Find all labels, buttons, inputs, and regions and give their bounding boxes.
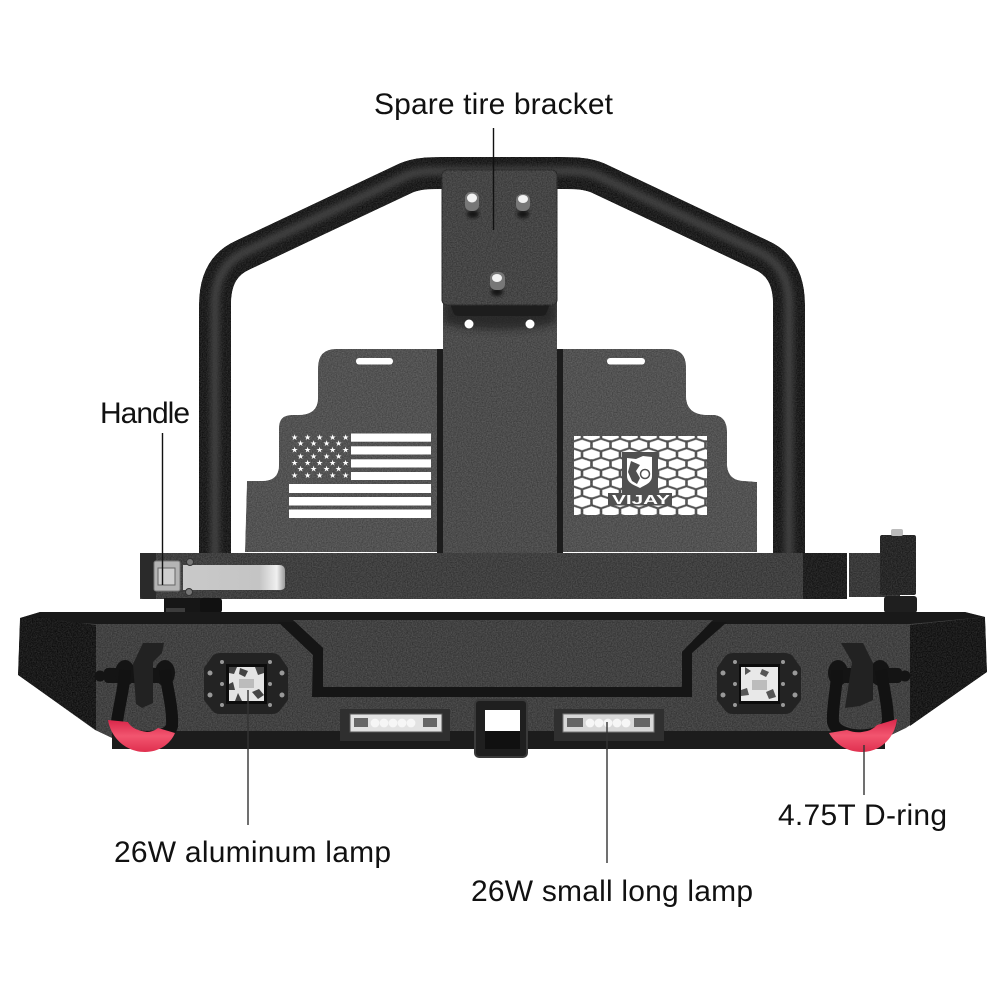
lamp plate [204, 653, 288, 714]
shackle bow [833, 670, 888, 736]
hinge pivot [880, 529, 917, 613]
leader line [606, 722, 608, 863]
lamp bolts [208, 660, 284, 707]
silver handle [154, 558, 285, 596]
left mounting plate with flag cutout [245, 349, 440, 552]
right dark end cap [910, 617, 987, 726]
shackle bow [117, 670, 172, 737]
lamp bolts [720, 660, 798, 707]
infographic: bumper with spare tire carrier [18, 92, 987, 907]
left D-ring shackle [94, 643, 175, 752]
lamp lens [563, 714, 654, 732]
spare tire hoop [215, 171, 789, 560]
lamp lens [739, 664, 780, 704]
latch mechanism under the handle [164, 598, 222, 618]
label: 4.75T D-ring [778, 799, 947, 832]
right long lamp [554, 709, 664, 741]
stud bolts [465, 192, 530, 296]
left plate body [245, 349, 440, 552]
american flag cutout: ★★★★★ [291, 446, 349, 454]
handle square [154, 561, 180, 591]
left long lamp [340, 709, 450, 741]
shackle collar [841, 643, 873, 708]
brand name: VIJAY [612, 493, 671, 507]
american flag cutout: ★★★★★ [291, 458, 349, 468]
right plate body [559, 349, 757, 552]
label: Spare tire bracket [374, 88, 614, 121]
bumper body [18, 612, 987, 749]
leader line [247, 690, 249, 825]
tow hitch receiver [475, 700, 527, 757]
rear bumper [18, 612, 987, 749]
leader line [162, 433, 164, 585]
left dark end cap [18, 617, 96, 730]
bracket shadow and mounting holes [443, 300, 557, 330]
label: 26W small long lamp [471, 875, 753, 908]
logo backing [608, 452, 672, 506]
post column [443, 300, 557, 555]
central post [437, 170, 563, 555]
top edge [20, 612, 985, 624]
swing arm crossbar [140, 529, 917, 613]
right D-ring shackle [828, 643, 910, 752]
lower dark strip [112, 731, 885, 749]
main bar [140, 553, 805, 599]
shackle pin [94, 660, 175, 686]
lamp lens [350, 714, 442, 732]
red protective sleeve [108, 720, 175, 752]
bar end sleeve [849, 553, 900, 597]
lion shield logo [627, 456, 652, 488]
red protective sleeve [829, 719, 897, 752]
honeycomb logo cutout [574, 436, 707, 515]
shackle collar [133, 643, 164, 708]
spare tire mounting plate [442, 170, 557, 305]
left square lamp [204, 653, 288, 714]
shackle pin [828, 660, 910, 686]
american flag cutout: ★★★★ [297, 439, 342, 448]
label: 26W aluminum lamp [114, 836, 391, 869]
center recess [278, 622, 727, 697]
leader line [492, 128, 494, 230]
hitch opening [485, 710, 520, 731]
lamp housing [554, 709, 664, 741]
american flag cutout: ★★★★ [297, 464, 342, 474]
label: Handle [100, 397, 190, 430]
american flag cutout [289, 433, 431, 518]
lamp plate [717, 653, 801, 714]
american flag cutout: ★★★★★ [291, 471, 349, 480]
dark bar end [803, 553, 847, 599]
left plate slot [356, 358, 393, 364]
lamp lens [226, 664, 267, 704]
leader line [863, 745, 865, 795]
right mounting plate with logo cutout [559, 349, 757, 552]
american flag cutout: ★★★★★ [291, 433, 349, 442]
right square lamp [717, 653, 801, 714]
center panel [293, 620, 713, 687]
american flag cutout: ★★★★ [297, 452, 342, 461]
handle lever [183, 565, 285, 590]
lamp housing [340, 709, 450, 741]
right plate slot [607, 358, 645, 364]
